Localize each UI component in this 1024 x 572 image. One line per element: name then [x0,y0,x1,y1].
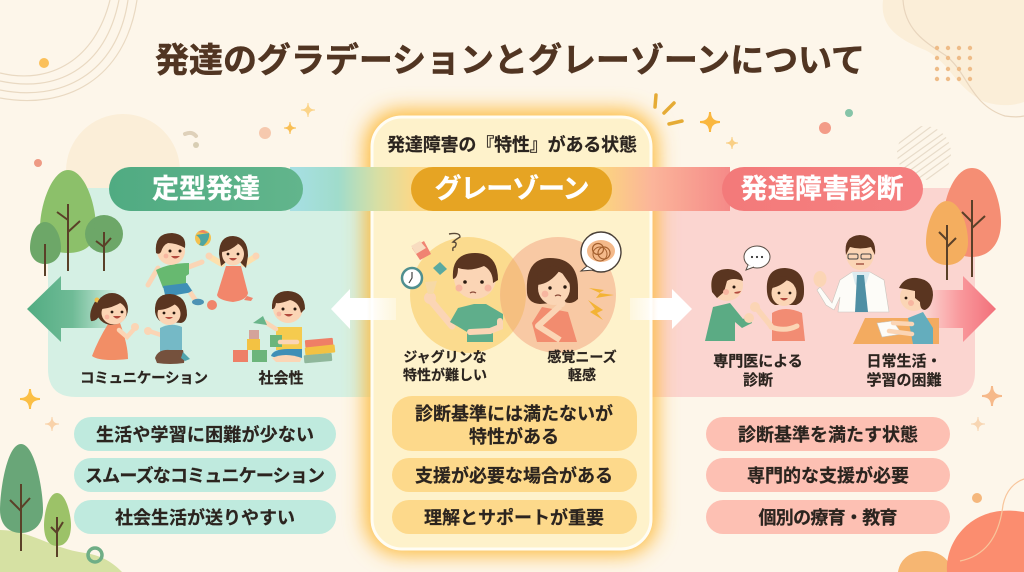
illustration: boy juggling [402,233,503,342]
arrow: left green [27,276,118,342]
label: daily life difficulty [866,353,942,389]
illustration: children playing ball [148,230,260,310]
label: communication: コミュニケーション [80,370,208,387]
pill: grey zone [411,167,612,211]
arrow: white right [630,289,692,329]
decoration: top-left arcs [0,0,137,101]
decoration: dot grid [935,46,972,81]
blobs: bottom right [898,479,1024,572]
illustration: doctor [814,235,889,312]
gradient band [290,167,730,211]
list: typical development [74,417,336,534]
illustration: overlapping circles [410,237,616,353]
decoration: top-right blob [883,0,1024,117]
grey zone subtitle: 発達障害の『特性』がある状態 [387,134,637,155]
list: typical development: 生活や学習に困難が少ない [96,424,314,445]
list: diagnosis [706,417,950,534]
label: specialist diagnosis: 専門医による [713,352,803,370]
list: grey zone: 理解とサポートが重要 [424,507,604,528]
label: juggling: 特性が難しい [403,367,487,383]
panel: grey zone glow [365,110,657,555]
hill and trees: bottom left [0,444,122,572]
label: sensory needs: 感覚ニーズ [547,349,617,365]
list: grey zone: 特性がある [469,426,559,447]
list: typical development: スムーズなコミュニケーション [85,465,325,486]
arrow: right pink [925,276,996,342]
illustration: child with blocks and books [233,291,335,363]
pill: typical development [109,167,303,211]
illustration: child at desk [853,278,939,344]
panel: grey zone [372,117,651,549]
label: daily life difficulty: 日常生活・ [866,353,942,370]
label: specialist diagnosis [713,352,803,389]
pill: diagnosis: 発達障害診断 [740,174,904,204]
list: diagnosis: 専門的な支援が必要 [747,465,909,486]
pill: grey zone: グレーゾーン [434,173,590,204]
panel: typical development background [48,188,372,397]
list: grey zone: 診断基準には満たないが [415,403,613,424]
label: daily life difficulty: 学習の困難 [866,371,942,389]
illustration: children talking [90,293,190,364]
label: sociality: 社会性 [258,370,304,387]
arrow: white left [331,289,396,329]
decoration: hatched circle [897,126,951,180]
illustration: girl thinking [527,232,621,342]
trees: top right [926,168,1001,280]
title: 発達のグラデーションとグレーゾーンについて [155,41,865,80]
list: grey zone: 支援が必要な場合がある [415,465,613,486]
list: typical development: 社会生活が送りやすい [115,507,295,528]
list: diagnosis: 個別の療育・教育 [758,508,898,528]
decoration: dots and sparkles [20,58,1002,503]
list: diagnosis: 診断基準を満たす状態 [738,424,918,445]
panel: diagnosis background [652,188,975,397]
label: sensory needs [547,349,617,383]
label: juggling: ジャグリンな [403,349,487,365]
decoration: cream circle [66,114,180,228]
illustration: two children talking [705,246,805,341]
pill: typical development: 定型発達 [152,174,260,204]
label: sensory needs: 軽感 [568,367,596,383]
pill: diagnosis [722,167,923,211]
label: specialist diagnosis: 診断 [743,372,773,389]
trees: top left [30,170,123,276]
list: grey zone [392,396,637,534]
label: juggling [403,349,487,383]
